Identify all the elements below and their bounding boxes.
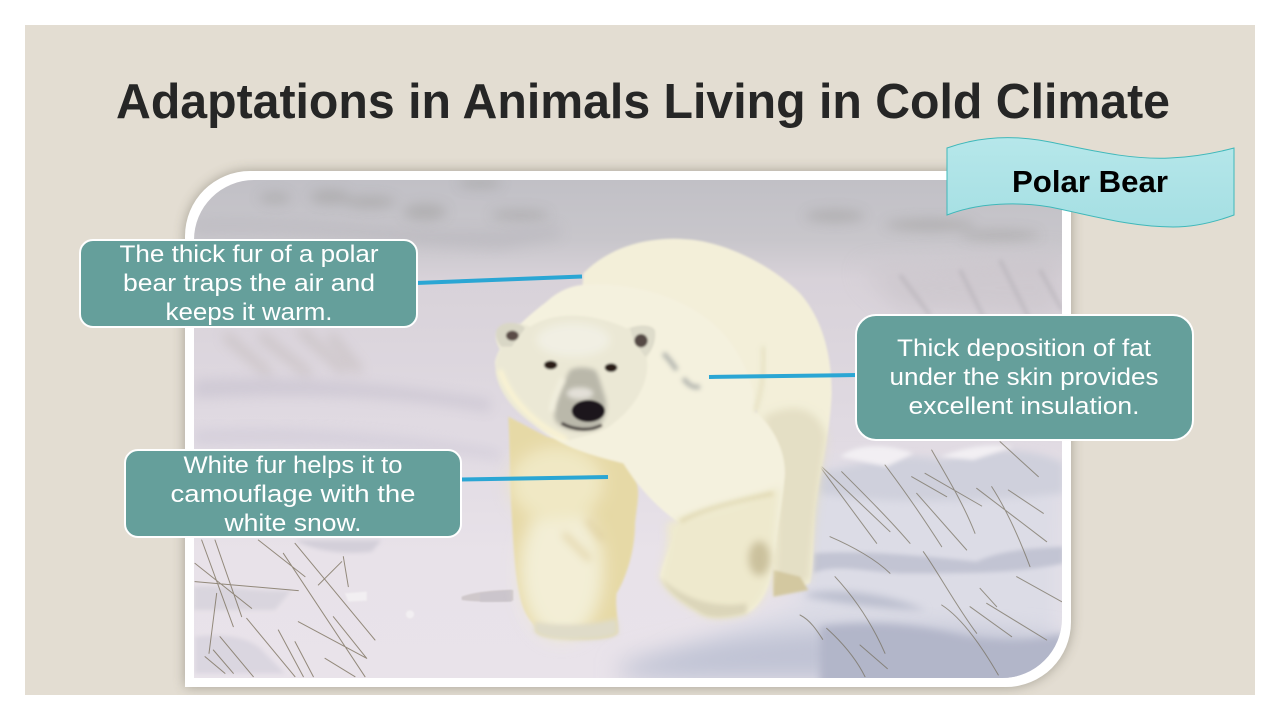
- callout: fat insulation: Thick deposition of fat: [897, 335, 1151, 362]
- callout: thick fur: The thick fur of a polar: [120, 241, 379, 268]
- snow shading: streaks and faint grass: [196, 237, 1062, 446]
- polar bear photo: [193, 178, 1063, 693]
- ground shadow left of paw: [481, 600, 512, 602]
- callout: fat insulation: [856, 315, 1193, 440]
- hind paw gravel: [773, 570, 808, 597]
- raised leg shading: [660, 487, 780, 618]
- paw underside: [660, 577, 747, 618]
- callout: thick fur: [80, 240, 417, 327]
- callout: fat insulation: excellent insulation.: [908, 393, 1140, 420]
- right ear: [631, 326, 655, 355]
- cheek edge: [500, 370, 567, 439]
- face highlight: [539, 325, 608, 356]
- foot: [534, 618, 618, 640]
- callout: camouflage: white snow.: [223, 510, 362, 537]
- snow background: [194, 180, 1062, 678]
- callout: thick fur: keeps it warm.: [166, 299, 332, 326]
- title: Adaptations in Animals Living in Cold Climate: [116, 75, 1170, 129]
- torso and hind leg: [580, 239, 832, 597]
- callout: camouflage: [125, 450, 461, 537]
- snow and grass: lower right: [800, 442, 1063, 693]
- snow shading: top band blotches: [259, 178, 1040, 240]
- mouth: [562, 423, 602, 429]
- shoulder marks: [663, 353, 700, 387]
- bear: [480, 239, 832, 640]
- callout: fat insulation: under the skin provides: [890, 364, 1158, 391]
- nose: [572, 400, 605, 422]
- frame shadow: [185, 171, 1071, 687]
- callout: camouflage: camouflage with the: [170, 481, 416, 508]
- left ear: [496, 323, 525, 347]
- callout: thick fur: bear traps the air and: [123, 270, 375, 297]
- muzzle: [554, 367, 606, 431]
- callout: camouflage: White fur helps it to: [184, 452, 402, 479]
- connector: thick fur: [416, 276, 582, 283]
- head: [496, 322, 646, 438]
- front leg highlights: [520, 500, 603, 640]
- lower snow wash: [760, 500, 1058, 633]
- banner: Polar Bear: Polar Bear: [1012, 164, 1168, 199]
- torso seam: [755, 347, 764, 412]
- banner: Polar Bear: [947, 138, 1234, 227]
- paw stain: [749, 541, 770, 576]
- photo frame: [185, 171, 1071, 687]
- front leg: [508, 417, 638, 640]
- chest, ruff and raised leg: [521, 284, 786, 526]
- hind leg shading: [763, 408, 827, 593]
- connector: white fur: [461, 477, 608, 480]
- connector: fat: [709, 375, 857, 377]
- eyes: [544, 361, 557, 369]
- snow and grass: lower left: [193, 540, 513, 677]
